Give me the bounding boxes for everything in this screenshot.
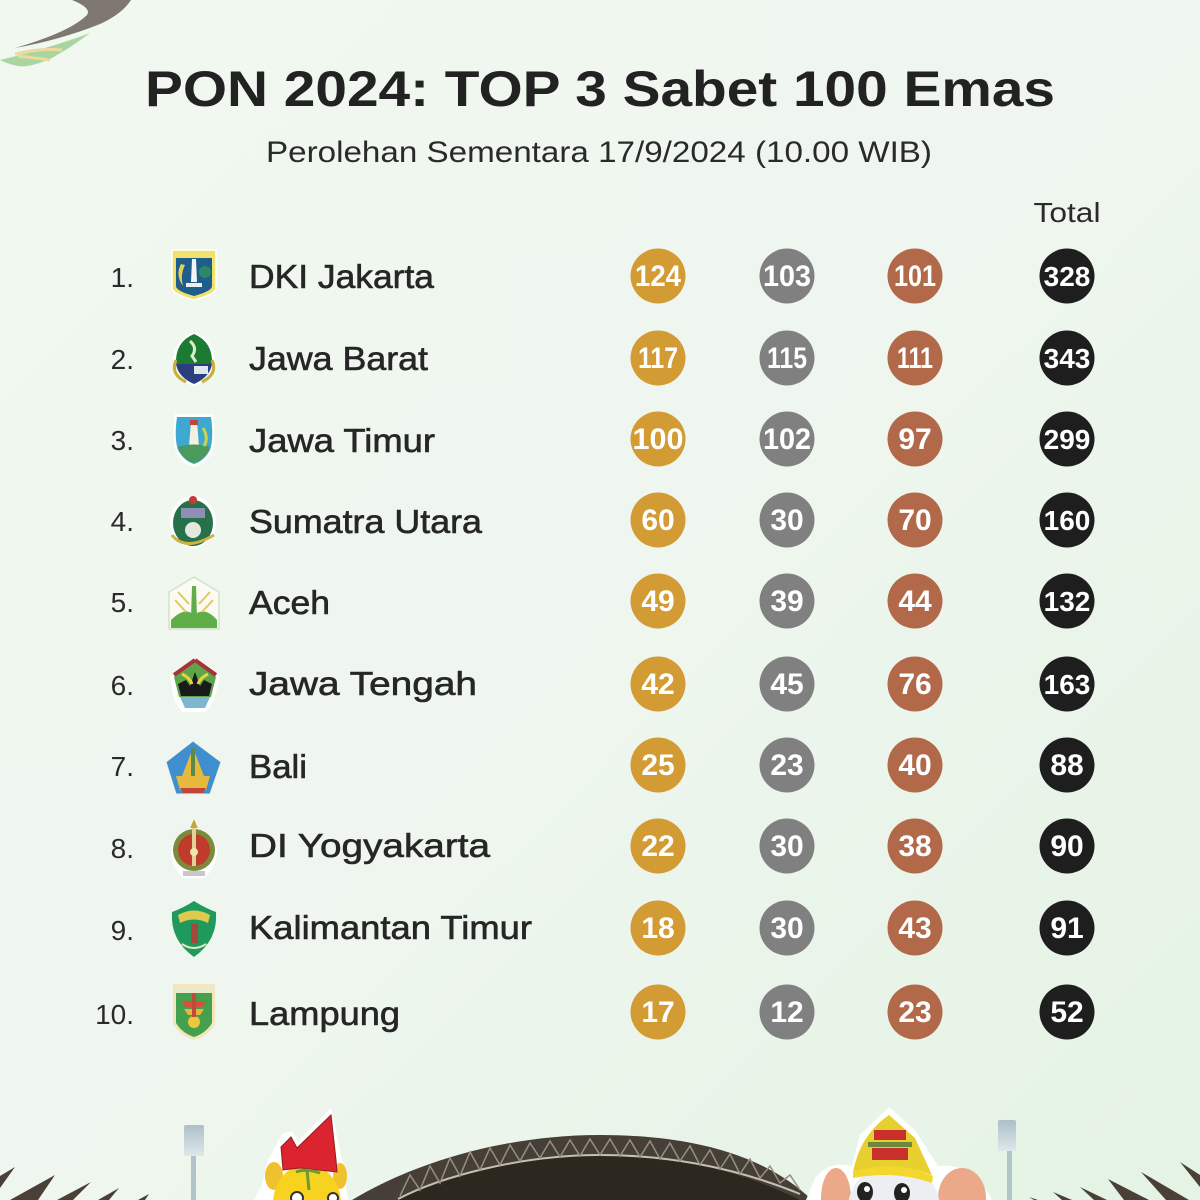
total: 160 — [1044, 505, 1090, 536]
emblem: Sumatra Utara — [170, 496, 216, 548]
row 9: Kalimantan Timur — [111, 900, 1094, 957]
row 6: Jawa Tengah — [111, 656, 1094, 712]
emblem: Jawa Timur — [174, 414, 214, 467]
bronze — [888, 818, 942, 874]
silver — [760, 656, 814, 712]
bronze — [888, 492, 942, 548]
bronze — [888, 738, 942, 792]
row 5: Aceh — [111, 574, 1094, 629]
gold — [630, 900, 686, 956]
row 8: DI Yogyakarta — [111, 818, 1094, 878]
silver — [760, 574, 814, 628]
total — [1040, 574, 1094, 628]
silver: 103 — [763, 260, 811, 293]
bronze — [888, 330, 942, 386]
gold: 42 — [641, 668, 675, 701]
bronze: 111 — [897, 342, 933, 375]
gold — [630, 656, 686, 712]
total: 88 — [1050, 749, 1084, 782]
bronze — [888, 656, 942, 712]
total — [1040, 492, 1094, 548]
total — [1040, 656, 1094, 712]
gold: 49 — [641, 585, 675, 618]
gold: 124 — [635, 260, 681, 293]
mascot: tiger — [254, 1108, 348, 1200]
silver: 30 — [770, 830, 804, 863]
silver: 45 — [770, 668, 804, 701]
total: 163 — [1044, 669, 1090, 700]
emblem: Kalimantan Timur — [172, 901, 216, 957]
silver — [760, 984, 814, 1040]
bronze — [888, 984, 942, 1040]
column heading: total: Total — [1034, 197, 1100, 228]
rank: 2. — [111, 344, 134, 375]
total — [1040, 330, 1094, 386]
name: Lampung — [249, 995, 400, 1032]
emblem: DKI Jakarta — [172, 250, 216, 300]
total: 91 — [1050, 912, 1084, 945]
emblem: Jawa Barat — [173, 332, 215, 386]
silver — [760, 330, 814, 386]
title: PON 2024: TOP 3 Sabet 100 Emas — [145, 61, 1055, 117]
name: Jawa Tengah — [249, 665, 477, 702]
row 7: Bali — [111, 738, 1094, 794]
bronze: 44 — [898, 585, 932, 618]
total: 90 — [1050, 830, 1084, 863]
total: 132 — [1044, 586, 1090, 617]
gold — [630, 738, 686, 792]
gold — [630, 412, 686, 466]
silver — [760, 492, 814, 548]
total — [1040, 818, 1094, 874]
total: 328 — [1044, 261, 1090, 292]
silver: 30 — [770, 912, 804, 945]
gold: 60 — [641, 504, 675, 537]
name: Jawa Barat — [249, 340, 428, 377]
rank: 5. — [111, 587, 134, 618]
illustration: stadium dome — [352, 1135, 812, 1200]
gold: 17 — [641, 996, 675, 1029]
gold — [630, 984, 686, 1040]
bronze: 101 — [894, 260, 936, 293]
name: Jawa Timur — [249, 422, 435, 459]
gold: 117 — [638, 342, 678, 375]
gold — [630, 818, 686, 874]
emblem: DI Yogyakarta — [171, 818, 217, 878]
name: DKI Jakarta — [249, 258, 435, 295]
bronze: 97 — [898, 423, 932, 456]
name: Bali — [249, 748, 307, 785]
rank: 9. — [111, 915, 134, 946]
rank: 10. — [95, 999, 134, 1030]
illustration: left roof spikes — [0, 1167, 149, 1200]
gold: 22 — [641, 830, 675, 863]
bronze: 76 — [898, 668, 932, 701]
subtitle: Perolehan Sementara 17/9/2024 (10.00 WIB) — [266, 136, 932, 169]
bronze — [888, 248, 942, 304]
total: 343 — [1044, 343, 1090, 374]
silver — [760, 738, 814, 792]
silver: 12 — [770, 996, 804, 1029]
total — [1040, 412, 1094, 466]
rank: 1. — [111, 262, 134, 293]
silver — [760, 818, 814, 874]
total: 299 — [1044, 424, 1090, 455]
gold — [630, 574, 686, 628]
silver — [760, 900, 814, 956]
total — [1040, 738, 1094, 792]
illustration: right roof spikes — [1029, 1162, 1200, 1200]
illustration: right floodlight — [998, 1120, 1016, 1200]
total — [1040, 248, 1094, 304]
gold: 100 — [632, 423, 684, 456]
gold — [630, 330, 686, 386]
mascot: elephant — [806, 1107, 992, 1200]
name: Kalimantan Timur — [249, 909, 532, 946]
total — [1040, 900, 1094, 956]
total — [1040, 984, 1094, 1040]
bronze: 23 — [898, 996, 932, 1029]
bronze: 40 — [898, 749, 932, 782]
silver: 115 — [767, 342, 807, 375]
row 10: Lampung — [95, 984, 1094, 1040]
name: Sumatra Utara — [249, 503, 483, 540]
row 3: Jawa Timur — [111, 412, 1094, 467]
rank: 4. — [111, 506, 134, 537]
emblem: Lampung — [173, 984, 215, 1040]
rank: 3. — [111, 425, 134, 456]
gold: 18 — [641, 912, 675, 945]
gold: 25 — [641, 749, 675, 782]
rank: 6. — [111, 670, 134, 701]
total: 52 — [1050, 996, 1084, 1029]
silver — [760, 248, 814, 304]
row 2: Jawa Barat — [111, 330, 1094, 386]
bronze — [888, 900, 942, 956]
gold — [630, 492, 686, 548]
bronze: 70 — [898, 504, 932, 537]
name: DI Yogyakarta — [249, 827, 491, 864]
name: Aceh — [249, 584, 330, 621]
emblem: Jawa Tengah — [170, 658, 220, 712]
silver — [760, 412, 814, 466]
bronze — [888, 412, 942, 466]
row 1: DKI Jakarta — [111, 248, 1094, 304]
row 4: Sumatra Utara — [111, 492, 1094, 548]
rank: 8. — [111, 833, 134, 864]
silver: 30 — [770, 504, 804, 537]
emblem: Aceh — [169, 577, 219, 629]
silver: 39 — [770, 585, 804, 618]
rank: 7. — [111, 751, 134, 782]
gold — [630, 248, 686, 304]
illustration: left floodlight — [184, 1125, 204, 1200]
silver: 102 — [763, 423, 811, 456]
bronze: 38 — [898, 830, 932, 863]
bronze — [888, 574, 942, 628]
bronze: 43 — [898, 912, 932, 945]
emblem: Bali — [166, 741, 221, 794]
silver: 23 — [770, 749, 804, 782]
decoration: top-left swoosh — [0, 0, 131, 66]
